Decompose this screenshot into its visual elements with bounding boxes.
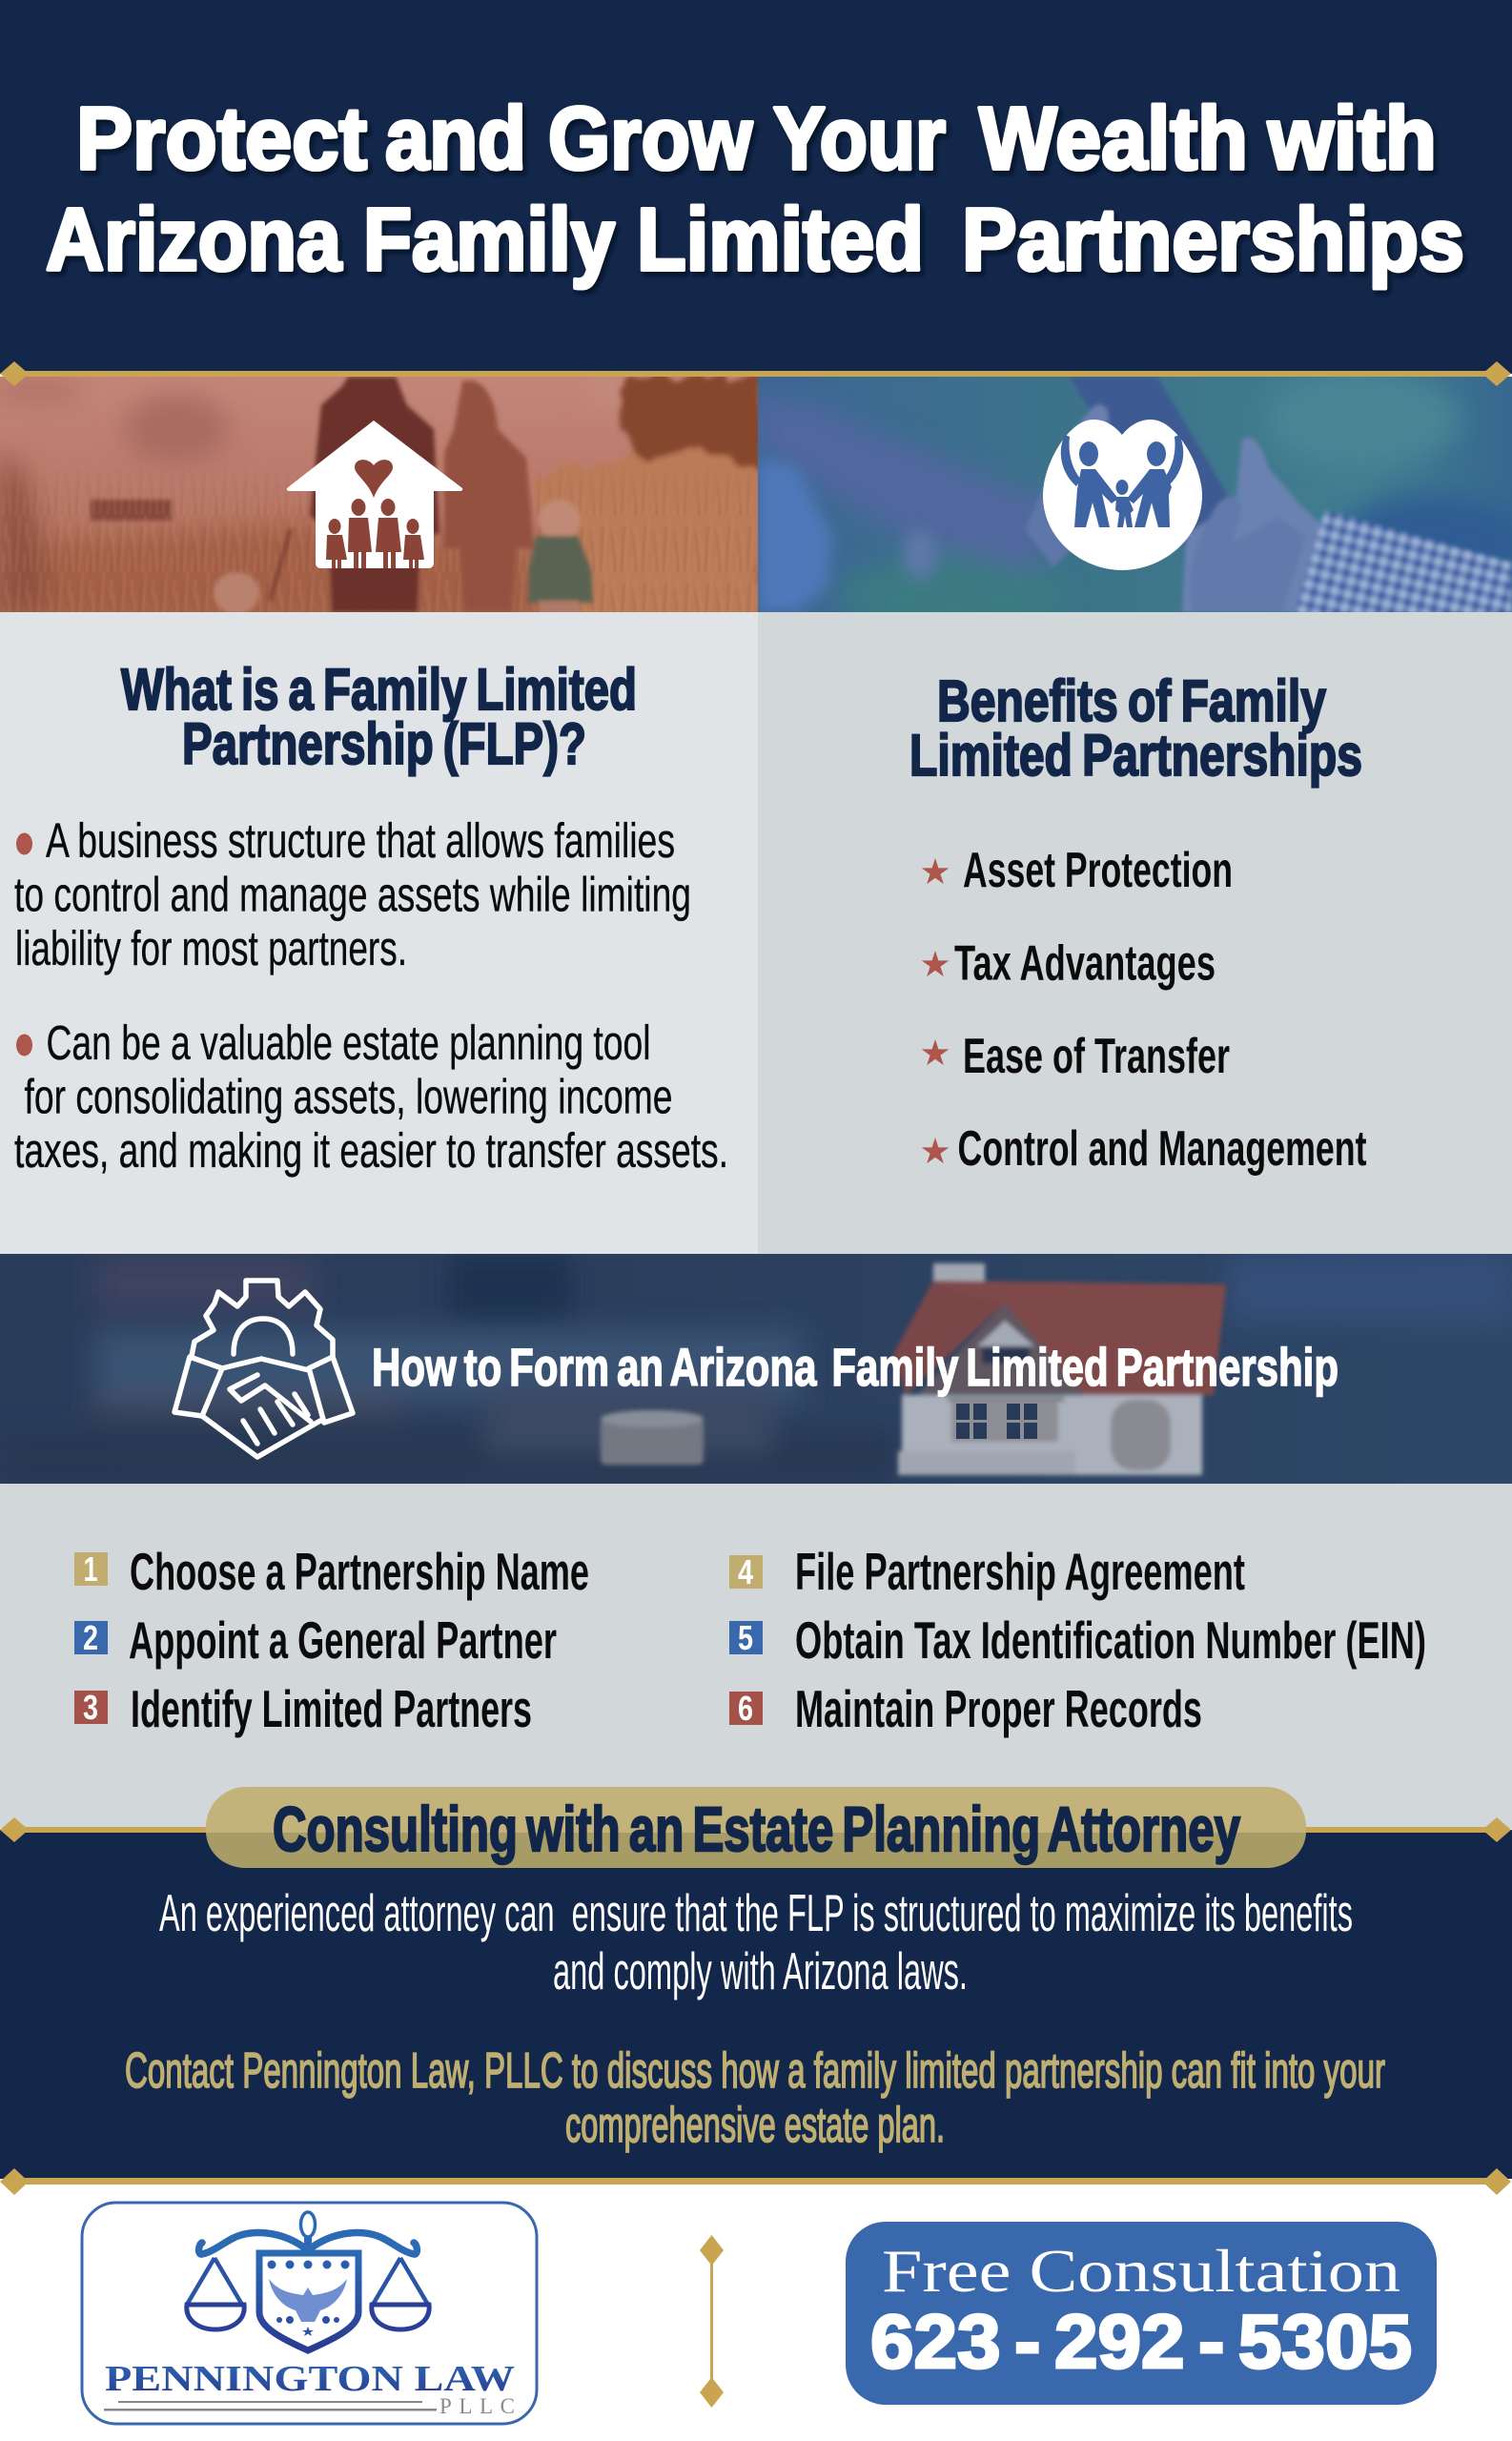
step 2: Appoint a General Partner	[129, 1610, 557, 1670]
title: Grow	[548, 89, 753, 188]
step 3	[74, 1679, 532, 1738]
title: Wealth	[979, 89, 1248, 188]
logo name: PENNINGTON LAW	[105, 2359, 515, 2399]
gold divider with diamonds	[0, 1817, 1511, 1842]
step 4: File Partnership Agreement	[795, 1542, 1245, 1601]
gold divider with diamonds	[0, 2168, 1511, 2195]
step 1: 1	[84, 1549, 97, 1589]
text block: attorney: and comply with Arizona laws.	[553, 1941, 968, 2000]
text block: contact	[125, 2043, 1385, 2153]
text block: first bullet: to control and manage assets while limiting	[14, 868, 691, 921]
icon: house with family	[287, 421, 462, 568]
icon: handshake in gear	[174, 1281, 353, 1457]
step 6	[729, 1679, 1202, 1738]
photo panel: family walking, red tint	[0, 377, 763, 620]
title: Family	[363, 190, 615, 289]
title: and	[385, 89, 526, 188]
benefit: asset protection: Asset Protection	[963, 843, 1233, 898]
text block: second bullet	[14, 1015, 728, 1178]
gold divider with diamonds	[0, 361, 1511, 386]
text block: first bullet: liability for most partners.	[15, 921, 407, 975]
step 1	[74, 1542, 589, 1601]
step 6: 6	[738, 1689, 753, 1728]
icon: family in heart circle	[1043, 420, 1202, 570]
title: Arizona	[46, 190, 342, 289]
step 2: 2	[83, 1618, 98, 1657]
step 6: Maintain Proper Records	[795, 1679, 1202, 1738]
text block: second bullet: taxes, and making it easier to transfer assets.	[14, 1123, 728, 1178]
callout: free consultation phone: Free Consultation	[882, 2237, 1400, 2305]
panel: formation steps	[0, 1484, 1512, 1829]
step 1: Choose a Partnership Name	[130, 1542, 589, 1601]
text block: contact: comprehensive estate plan.	[565, 2098, 945, 2153]
benefit: ease of transfer	[922, 1029, 1230, 1084]
benefit: tax advantages: Tax Advantages	[954, 936, 1216, 992]
heading: benefits of family limited partnerships: Benefits of Family	[937, 668, 1326, 733]
heading: what is a family limited partnership: Partnership (FLP)?	[182, 711, 586, 776]
text block: first bullet: A business structure that allows families	[46, 813, 675, 868]
title: Limited	[637, 190, 924, 289]
step 4	[729, 1542, 1245, 1601]
title: Partnerships	[962, 190, 1464, 289]
text block: attorney	[159, 1883, 1353, 2000]
step 3: 3	[83, 1688, 98, 1727]
benefit: ease of transfer: Ease of Transfer	[963, 1029, 1230, 1084]
header panel	[0, 0, 1512, 374]
text block: second bullet: Can be a valuable estate planning tool	[46, 1015, 650, 1070]
step 2	[74, 1610, 557, 1670]
text block: second bullet: for consolidating assets, lowering income	[25, 1070, 673, 1123]
callout: free consultation phone: 623 - 292 - 5305	[870, 2299, 1412, 2384]
benefit: asset protection	[922, 843, 1233, 898]
vertical gold divider	[700, 2235, 724, 2408]
title: Your	[773, 89, 946, 188]
banner: how to form	[0, 1254, 1512, 1484]
logo: pennington law	[82, 2203, 537, 2424]
heading: what is a family limited partnership: What is a Family Limited	[121, 657, 637, 722]
callout: free consultation phone	[846, 2222, 1437, 2405]
icon: scales and shield	[187, 2212, 429, 2350]
photo panel: joined hands, blue tint	[758, 377, 1512, 612]
logo: pennington law: PLLC	[439, 2394, 515, 2418]
benefit: tax advantages	[922, 936, 1216, 992]
step 4: 4	[738, 1552, 753, 1591]
step 5: 5	[738, 1618, 753, 1657]
panel: benefits	[758, 612, 1512, 1254]
title	[46, 89, 1464, 289]
benefit: control and management	[922, 1121, 1367, 1177]
title: with	[1267, 89, 1437, 188]
heading: what is a family limited partnership	[121, 657, 637, 776]
text block: first bullet	[14, 813, 691, 975]
panel: consulting	[0, 1787, 1512, 2179]
title: Protect	[76, 89, 367, 188]
heading: benefits of family limited partnerships: Limited Partnerships	[909, 723, 1362, 788]
heading: benefits of family limited partnerships	[909, 668, 1362, 788]
step 3: Identify Limited Partners	[131, 1679, 532, 1738]
panel: what is an FLP	[0, 612, 758, 1254]
